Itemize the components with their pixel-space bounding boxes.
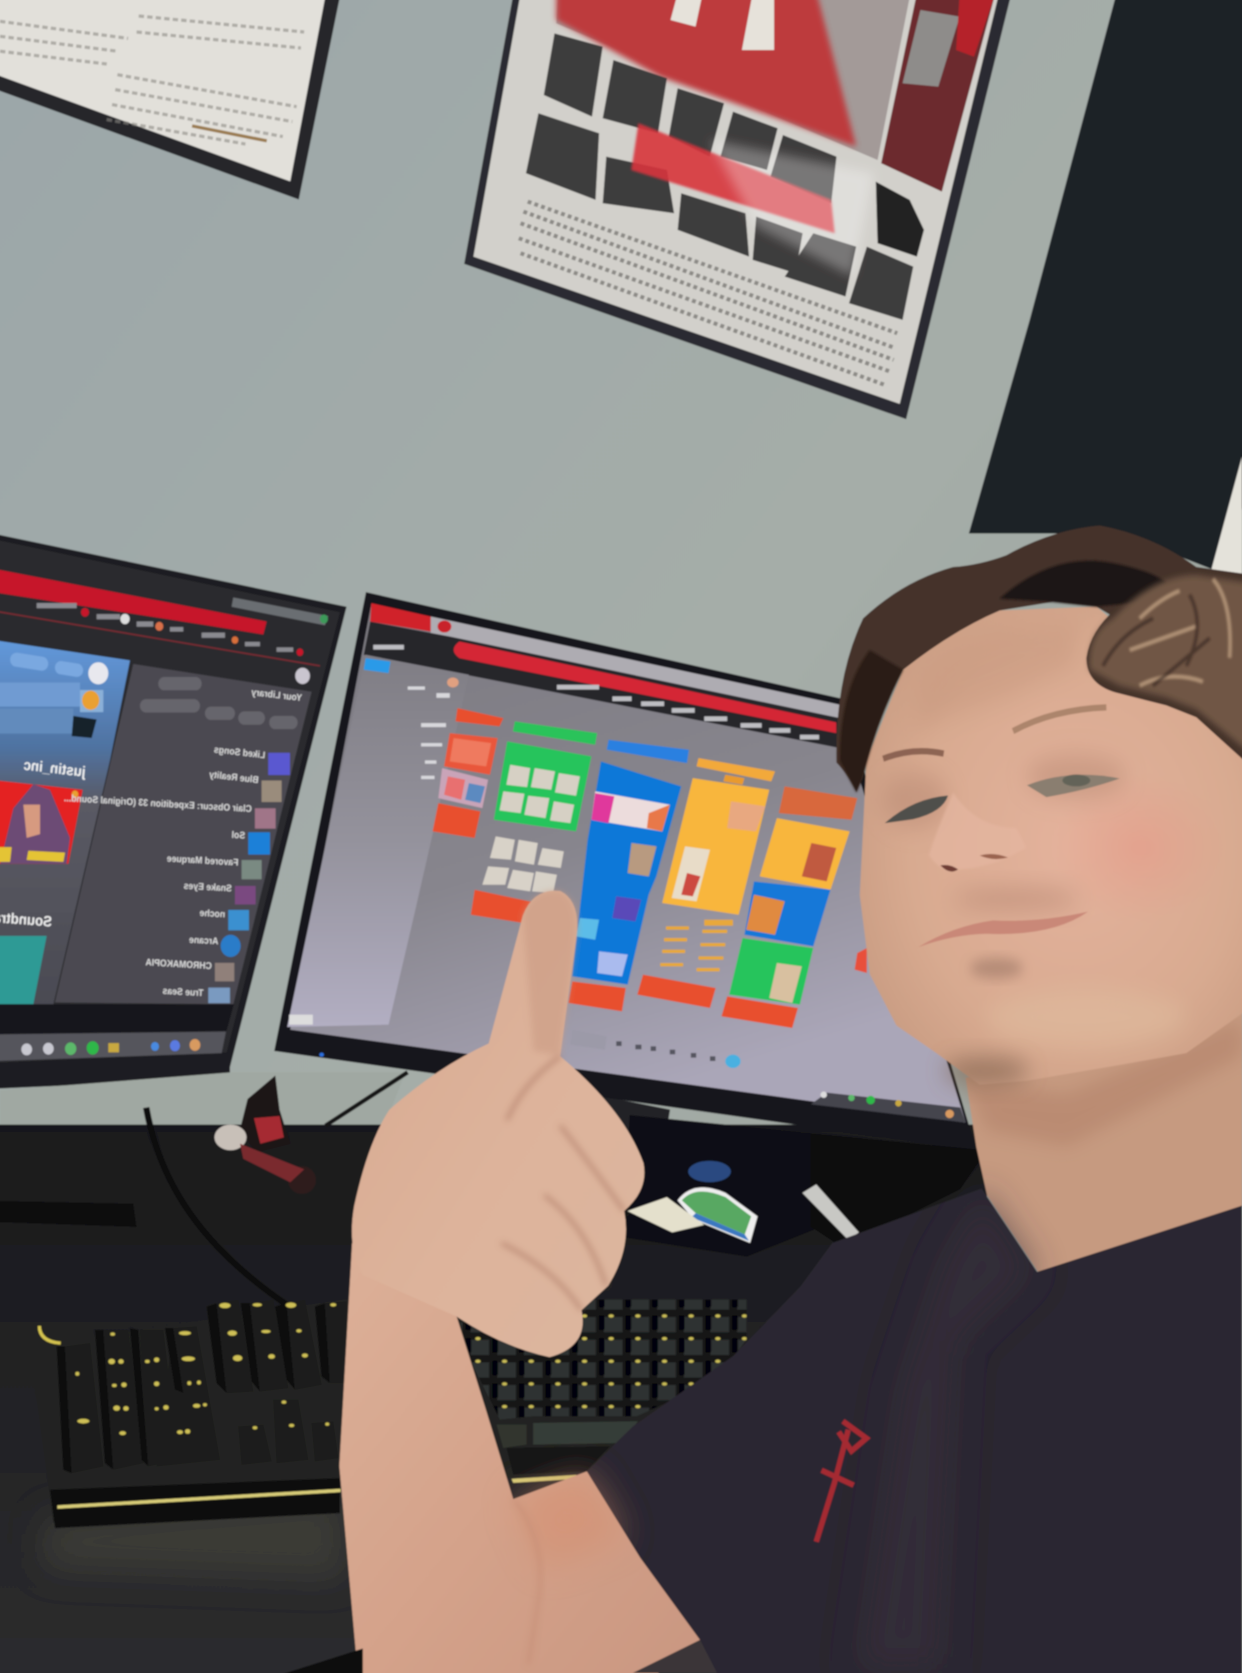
front edge	[507, 1446, 610, 1475]
window strip	[1211, 457, 1242, 576]
bookmark chips	[37, 603, 303, 656]
teal album art	[0, 936, 47, 1004]
chin stubble	[943, 1058, 1030, 1084]
library text: Clair Obscur: Expedition 33 (Original Sound...	[64, 793, 252, 814]
keyboard deck	[30, 1300, 745, 1523]
bookmark labels	[373, 645, 819, 739]
cheek flush	[1053, 773, 1226, 923]
poster art	[556, 0, 910, 160]
poster caption	[519, 202, 897, 385]
eye sockets	[881, 773, 948, 828]
sidebar labels	[408, 686, 450, 779]
elbow crease	[513, 1471, 624, 1568]
red button one	[471, 890, 545, 925]
sticker: small figure	[627, 1197, 704, 1232]
pen	[802, 1184, 859, 1240]
right brow	[1013, 707, 1106, 731]
monitor stand	[590, 1094, 670, 1174]
left monitor	[0, 531, 347, 1089]
sticker: blue badge	[688, 1161, 731, 1182]
toolbar	[364, 621, 840, 748]
head	[836, 526, 1242, 1085]
library text: Your Library	[250, 687, 302, 703]
tools sidebar	[287, 655, 469, 1027]
off-canvas red	[855, 948, 867, 973]
forearm	[339, 1243, 700, 1673]
playlist card: dark icon	[72, 716, 97, 738]
thin cable	[325, 1072, 408, 1126]
library chips	[140, 677, 298, 729]
red url bar	[454, 641, 836, 733]
taskbar	[811, 1093, 966, 1122]
library text: True Seas	[162, 985, 204, 998]
player bar	[0, 1004, 234, 1035]
orange column	[697, 758, 775, 781]
figurine	[214, 1076, 316, 1194]
July photo grid	[482, 836, 564, 893]
hair dark band	[1000, 561, 1166, 607]
chin highlight	[986, 990, 1186, 1045]
wall under left monitor	[0, 1072, 405, 1127]
browser red bar	[0, 566, 267, 634]
library panel	[55, 664, 312, 1004]
poster bottom line	[192, 126, 267, 141]
upper lip shade	[953, 888, 1080, 910]
poster right art	[881, 0, 995, 192]
window tab	[232, 597, 328, 625]
light bar	[512, 1475, 577, 1483]
lower lip shadow	[970, 958, 1023, 978]
status bar clock	[289, 1015, 313, 1025]
share button	[364, 658, 390, 673]
library thumbnails	[268, 753, 290, 775]
centre monitor	[274, 592, 976, 1150]
filter chips	[9, 652, 84, 678]
left eye	[885, 795, 948, 823]
right eye	[1027, 775, 1120, 797]
profile circle	[295, 668, 310, 684]
bottom toolbar	[570, 1030, 607, 1050]
taskbar	[0, 1032, 226, 1062]
poster kanji	[631, 123, 835, 233]
poster lettering	[526, 33, 924, 320]
bookmark red line	[0, 609, 320, 666]
light bar	[57, 1489, 341, 1509]
sidebar profile dot	[447, 677, 459, 687]
face shape	[860, 607, 1242, 1085]
left poster	[0, 0, 344, 200]
browser tab strip	[431, 616, 840, 718]
main blue panel	[0, 638, 130, 1004]
sticker: frog	[678, 1187, 758, 1243]
logo glow	[39, 1326, 61, 1343]
shirt folds	[854, 1189, 1037, 1673]
blue column	[607, 740, 689, 763]
red album art	[0, 779, 83, 864]
library text: CHROMAKOPIA	[145, 957, 212, 971]
centre poster	[464, 0, 1011, 419]
monitor cable	[146, 1108, 290, 1307]
t-shirt	[587, 1189, 1242, 1673]
left device on desk	[0, 1200, 137, 1227]
nose	[929, 792, 1026, 871]
left brow	[883, 751, 944, 759]
hair curls	[1089, 575, 1242, 753]
hand and thumb	[352, 891, 644, 1357]
spacebar	[533, 1421, 638, 1445]
orange text on canvas	[660, 920, 733, 971]
red footer orange	[637, 975, 716, 1008]
forehead shade	[913, 622, 1080, 729]
green column	[513, 721, 597, 745]
neck	[966, 992, 1242, 1275]
keyboard right keys	[460, 1300, 746, 1483]
thumb shading	[523, 891, 577, 1056]
library text: noche	[199, 907, 225, 919]
poster glare	[710, 140, 874, 277]
library text	[64, 687, 302, 998]
finger creases	[502, 1056, 624, 1310]
hair	[836, 526, 1242, 792]
username text: justin_inc	[23, 756, 87, 780]
neck shadow	[966, 1019, 1242, 1147]
library text: Sol	[231, 829, 245, 841]
desk glow	[43, 1492, 347, 1579]
monitor stand base and stickers	[624, 1115, 987, 1257]
rose graphic	[816, 1421, 866, 1542]
playlist card: sun icon	[80, 690, 103, 712]
right column	[779, 786, 857, 820]
dark side wall	[969, 0, 1242, 571]
library text: Snake Eyes	[183, 880, 232, 894]
playlist card: second row	[0, 708, 73, 734]
person	[339, 526, 1242, 1673]
library text: Favored Marquee	[167, 853, 239, 868]
library text: Liked Songs	[214, 744, 266, 760]
power led	[319, 1053, 324, 1057]
desk	[0, 1125, 987, 1673]
sleeve shadow	[633, 1640, 717, 1673]
library text: Arcane	[189, 934, 219, 946]
red footer blue	[568, 981, 626, 1011]
playlist card: first row	[0, 683, 80, 707]
red tab	[370, 603, 431, 631]
keyboard left keys	[39, 1300, 347, 1528]
red column	[456, 708, 503, 726]
bottom desk shadow	[219, 1648, 363, 1673]
library text: Blue Reality	[208, 769, 259, 785]
mouth	[918, 912, 1088, 947]
